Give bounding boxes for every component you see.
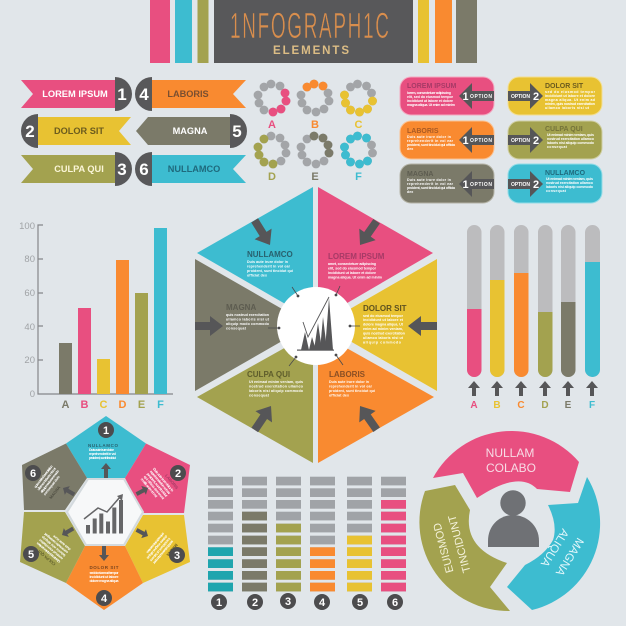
segment 2: laboris [125,444,190,513]
segment: culpa qui: nostrud exercitation ullamco [249,384,304,388]
option panel: nullamco: laboris nisi aliquip commodo [546,185,594,189]
option panel: nullamco: NULLAMCO [545,170,586,177]
column 1 [208,477,233,610]
segment: dolor sit [322,259,437,391]
segment 1: nullamco: proident, sunt tincidut [89,456,117,460]
segment: culpa qui: consequat [249,394,270,398]
segment 5: culpa qui: CULPA QUI [37,549,57,567]
segment: laboris: reprehenderit in vol ear [329,384,373,388]
option panel: culpa qui: nostrud exercitation ullamco [547,137,595,141]
arrow segment: euismod tincidunt: TINCIDUNT [446,513,473,574]
option panel: lorem ipsum: lorem, consectetuer adipiscing [407,91,451,95]
option panel: nullamco: nostrud exercitation ullamco [546,181,594,185]
option panel: culpa qui: CULPA QUI [545,126,583,133]
segment 5: culpa qui: nostrud exercitation [38,538,64,560]
segment: lorem ipsum: amet, consectetuer adipiscing [328,262,376,266]
option panel: culpa qui: laboris nisi aliquip commodo [547,141,595,145]
segment: laboris: Duis aute irure dolor in [329,380,369,384]
center circle [277,287,355,365]
segment: dolor sit: incididunt ut labore et [363,318,404,322]
center hexagon [67,479,143,545]
option panel: dolor sit: DOLOR SIT [545,83,584,90]
segment: lorem ipsum: magna aliqua. Ut enim ad minim [328,276,382,280]
option panel: lorem ipsum: incididunt ut labore et dolore [407,99,453,103]
option panel: nullamco: OPTION [511,182,530,188]
option panel: culpa qui: 2 [533,135,539,147]
segment 3: magna: dolore magna aliqua [145,534,168,561]
dot ring B [297,80,333,131]
segment: laboris: LABORIS [329,370,366,379]
arrow segment: magna aliqua [507,477,600,610]
option panel: culpa qui: consequat [547,145,568,149]
arrow segment: nullam colabo: NULLAM [486,446,534,460]
dot ring B: B [311,119,319,131]
segment: laboris [318,332,434,463]
segment: nullamco: NULLAMCO [247,250,293,259]
segment 6: nullam: aliquip modo commodo [40,469,61,494]
bar chart: C [100,399,108,411]
bar chart: 40 [24,322,35,333]
segment: culpa qui: laboris nisi aliquip commodo [249,389,304,393]
arrow segment: euismod tincidunt: EUISMOD [432,521,456,574]
ribbon 4: laboris [135,77,246,111]
segment: culpa qui: CULPA QUI [247,370,290,379]
tube E [561,225,576,411]
arrow segment: euismod tincidunt [419,485,510,611]
segment 5: culpa qui: Ut enimad minim veniam [36,541,61,564]
dot ring C: C [355,119,363,131]
dot ring D: D [268,171,276,183]
option panel: laboris: reprehenderit in vol ear [407,139,454,143]
option panel: magna: MAGNA [407,171,433,178]
option panel: nullamco: consequat [546,189,567,193]
segment: magna [195,259,310,391]
column 2: 2 [252,597,258,609]
segment 1: nullamco: NULLAMCO [88,443,118,448]
segment: lorem ipsum: LOREM IPSUM [328,252,385,261]
number badge 4 [96,590,112,606]
tube E: E [565,400,572,411]
segment 3: magna [125,515,190,583]
option panel: lorem ipsum: elit, sed do eiusmod tempor [407,95,454,99]
icon: mountain chart [297,297,334,351]
dot ring D [254,132,290,183]
segment: dolor sit: ullamco laboris nisi ut [363,336,404,340]
ribbon 2: dolor sit: DOLOR SIT [54,126,104,136]
segment 2: laboris: qui officia deserunt [143,475,166,501]
segment 4: dolor sit [66,546,143,610]
option panel: nullamco: Ut enimad minim veniam, quis [546,177,593,181]
option panel: dolor sit: ullamco laboris nisi ut [545,106,590,110]
segment: lorem ipsum: incididunt ut labore et dolore [328,271,376,275]
center connector ticks [268,286,360,366]
segment: dolor sit: DOLOR SIT [363,304,407,313]
segment: magna: ullamco laboris nisi ut [226,318,270,322]
ribbon 3: culpa qui [21,152,132,186]
bar chart: A [62,399,70,411]
segment: magna: MAGNA [226,303,256,312]
number badge 2 [170,465,186,481]
option panel: laboris: dex [407,147,413,151]
segment 3: magna: sed do eiusmod tempor [152,539,174,565]
number badge 5 [23,546,39,562]
segment 1: nullamco: reprehenderit in vol [89,452,116,456]
tube F [585,225,600,411]
segment 5: culpa qui: commodo consequat [43,531,69,554]
bar chart [19,221,173,411]
ribbon 4: laboris: 4 [139,85,149,104]
number badge 5: 5 [28,549,34,561]
number badge 3 [169,547,185,563]
dot ring E: E [311,171,319,183]
segment: nullamco: proident, sunt tincidut qui [247,269,293,273]
bar chart: 0 [30,389,35,400]
option panel: dolor sit [508,77,602,115]
ribbon 5: magna: 5 [232,122,242,141]
ribbon 5: magna [136,114,247,148]
number badge 1 [98,422,114,438]
segment 5: culpa qui: laboris nisi aliquip [40,535,66,557]
dot ring A: A [268,119,276,131]
segment: dolor sit: sed do eiusmod tempor [363,314,404,318]
column 3: 3 [285,596,291,608]
segment: lorem ipsum [318,187,433,320]
option panel: laboris: Duis aute irure dolor in [407,135,451,139]
column 5: 5 [357,597,363,609]
option panel: culpa qui: OPTION [511,138,530,144]
bar chart: 100 [19,221,35,232]
option panel: lorem ipsum [400,77,494,115]
option panel: lorem ipsum: OPTION [470,94,492,100]
option panel: dolor sit: incididunt ut labore et dolore [545,94,595,98]
segment 6: nullam: MAGNA [48,485,61,500]
segment 6: nullam: quis nostrud exercitation [33,464,54,489]
segment 6: nullam [22,444,87,510]
dot ring A [254,80,290,131]
bar chart: 20 [24,355,35,366]
column 4: 4 [319,597,326,609]
segment: nullamco: officiat dex [247,274,267,278]
number badge 1: 1 [103,425,109,437]
column 3 [276,477,301,609]
option panel: magna: 1 [462,179,469,191]
dot ring F [340,132,377,183]
ribbon 3: culpa qui: 3 [117,160,127,179]
option panel: magna: Duis aute irure dolor in [407,178,451,182]
segment: magna: aliquip modo commodo [226,322,270,326]
number badge 6: 6 [30,468,36,480]
option panel: dolor sit: 2 [533,91,539,103]
ribbon 2: dolor sit: 2 [25,122,35,141]
option panel: laboris [400,121,494,159]
column 2 [242,477,267,610]
stacked level columns [208,477,406,610]
segment 1: nullamco: Duis aute irure dolor [89,448,115,452]
bar chart: 60 [24,288,35,299]
dot ring F: F [355,171,362,183]
option panel: nullamco: 2 [533,179,539,191]
ribbon 1: lorem ipsum [21,77,132,111]
option panel: lorem ipsum: LOREM IPSUM [407,83,457,90]
segment 1: nullamco [66,416,146,478]
option panel: laboris: LABORIS [407,128,439,135]
option panel: magna: OPTION [470,182,492,188]
segment 4: dolor sit: incididunt ut labore [90,575,118,579]
ribbon 2: dolor sit [21,114,131,148]
option panel: magna [400,164,494,203]
arrow segment: magna aliqua: ALIQUA [538,526,570,569]
header banner [150,0,477,63]
segment: laboris: proident, sunt tincidut qui [329,389,375,393]
arrow segment: nullam colabo: COLABO [486,461,536,475]
tube B [490,225,504,411]
ribbon 5: magna: MAGNA [173,126,208,136]
segment: culpa qui [197,332,313,463]
segment 5: culpa qui: duis aute irure [52,534,72,551]
option panel: laboris: proident, sunt tincidut qui officia [407,143,456,147]
option panel: lorem ipsum: 1 [462,91,469,103]
segment 4: dolor sit: DOLOR SIT [90,565,119,570]
arrow segment: nullam colabo [433,431,579,498]
option panel: culpa qui [508,121,602,159]
segment: magna: quis nostrud exercitation [226,313,269,317]
number badge 6 [25,465,41,481]
icon: person [488,490,539,547]
option panel: magna: proident, sunt tincidut qui officia [407,186,456,190]
number badge 3: 3 [174,550,180,562]
column 1: 1 [216,597,222,609]
option panel: dolor sit: OPTION [511,94,530,100]
title: 1NFOGRAPH1C [230,7,389,47]
ribbon 3: culpa qui: CULPA QUI [54,164,104,174]
bar chart: F [157,399,164,411]
segment: culpa qui: Ut enimad minim veniam, quis [249,380,303,384]
ribbon 6: nullamco: NULLAMCO [168,164,220,174]
icon: bar chart with arrow [84,494,123,534]
option panel: dolor sit: minim, quis nostrud exercitation [545,102,595,106]
ribbon 6: nullamco: 6 [139,160,149,179]
ribbon 1: lorem ipsum: LOREM IPSUM [42,89,108,99]
option panel: magna: reprehenderit in vol ear [407,182,454,186]
option panel: dolor sit: sed do eiusmod tempor [545,90,596,94]
segment: dolor sit: aliquip commodo [363,340,402,344]
segment 2: laboris: Duis aute irure dolor in [152,467,174,493]
tube B: B [493,400,501,411]
tube C: C [517,400,525,411]
segment 2: laboris: proident, sunt tincidut [146,472,169,498]
segment: magna: consequat [226,326,247,330]
segment: nullamco: Duis aute irure dolor in [247,260,288,264]
bar chart: E [138,399,145,411]
bar chart: 80 [24,254,35,265]
segment 6: nullam: consequat duis [43,475,61,496]
tube A [467,225,482,411]
tube F: F [589,400,595,411]
segment 3: magna: incididunt ut labore [149,537,171,562]
segment: nullamco: reprehenderit in vol ear [247,264,291,268]
ribbon 4: laboris: LABORIS [167,89,209,99]
segment 2: laboris: mollit anim id est [140,477,159,499]
segment 3: magna: MAGNA [165,543,179,557]
tube D: D [541,400,549,411]
segment 4: dolor sit: sed do eiusmod tempor [90,571,119,575]
option panel: laboris: OPTION [470,138,492,144]
segment 2: laboris: LABORIS [164,473,180,490]
dot ring E [297,132,333,183]
tube C [514,225,528,411]
segment: dolor sit: quis nostrud exercitation [363,332,405,336]
option panel: laboris: 1 [462,135,469,147]
option panel: magna: dex [407,190,413,194]
dot ring C [340,80,377,131]
column 5 [347,477,372,610]
tube D [538,225,552,411]
segment 5: culpa qui [20,512,85,583]
number badge 2: 2 [175,468,181,480]
central hexagon diagram [195,187,437,463]
column 6 [381,477,406,610]
bar chart: D [119,399,127,411]
column 4 [310,477,335,610]
column 6: 6 [392,597,398,609]
segment: dolor sit: dolore magna aliqua. Ut [363,322,404,326]
segment: dolor sit: enim ad minim veniam, [363,327,403,331]
small hexagon diagram [20,416,190,610]
segment: nullamco [197,187,313,320]
vertical tube gauges [467,225,600,411]
number badge 4: 4 [101,593,108,605]
segment: laboris: officiat dex [329,394,349,398]
option panel: dolor sit: magna aliqua. Ut enim ad [545,98,595,102]
tube A: A [470,400,478,411]
ribbon 1: lorem ipsum: 1 [117,85,127,104]
segment 6: nullam: ullamco laboris nisi ut [36,466,57,491]
segment 2: laboris: reprehenderit in vol ear [149,470,172,496]
arrow segment: magna aliqua: MAGNA [553,535,585,578]
segment: lorem ipsum: elit, sed do eiusmod tempor [328,266,377,270]
bar chart: B [81,399,89,411]
circular arrows diagram [419,431,600,611]
option panel: culpa qui: Ut enimad minim veniam, quis [547,133,594,137]
option panel: lorem ipsum: magna aliqua. Ut enim ad minim [407,103,455,107]
subtitle: ELEMENTS [273,45,349,57]
option panel: nullamco [508,164,602,203]
segment 4: dolor sit: dolore magna aliqua [90,579,120,583]
segment 3: magna: enim ad minim veniam [145,532,165,554]
ribbon 6: nullamco [135,152,246,186]
